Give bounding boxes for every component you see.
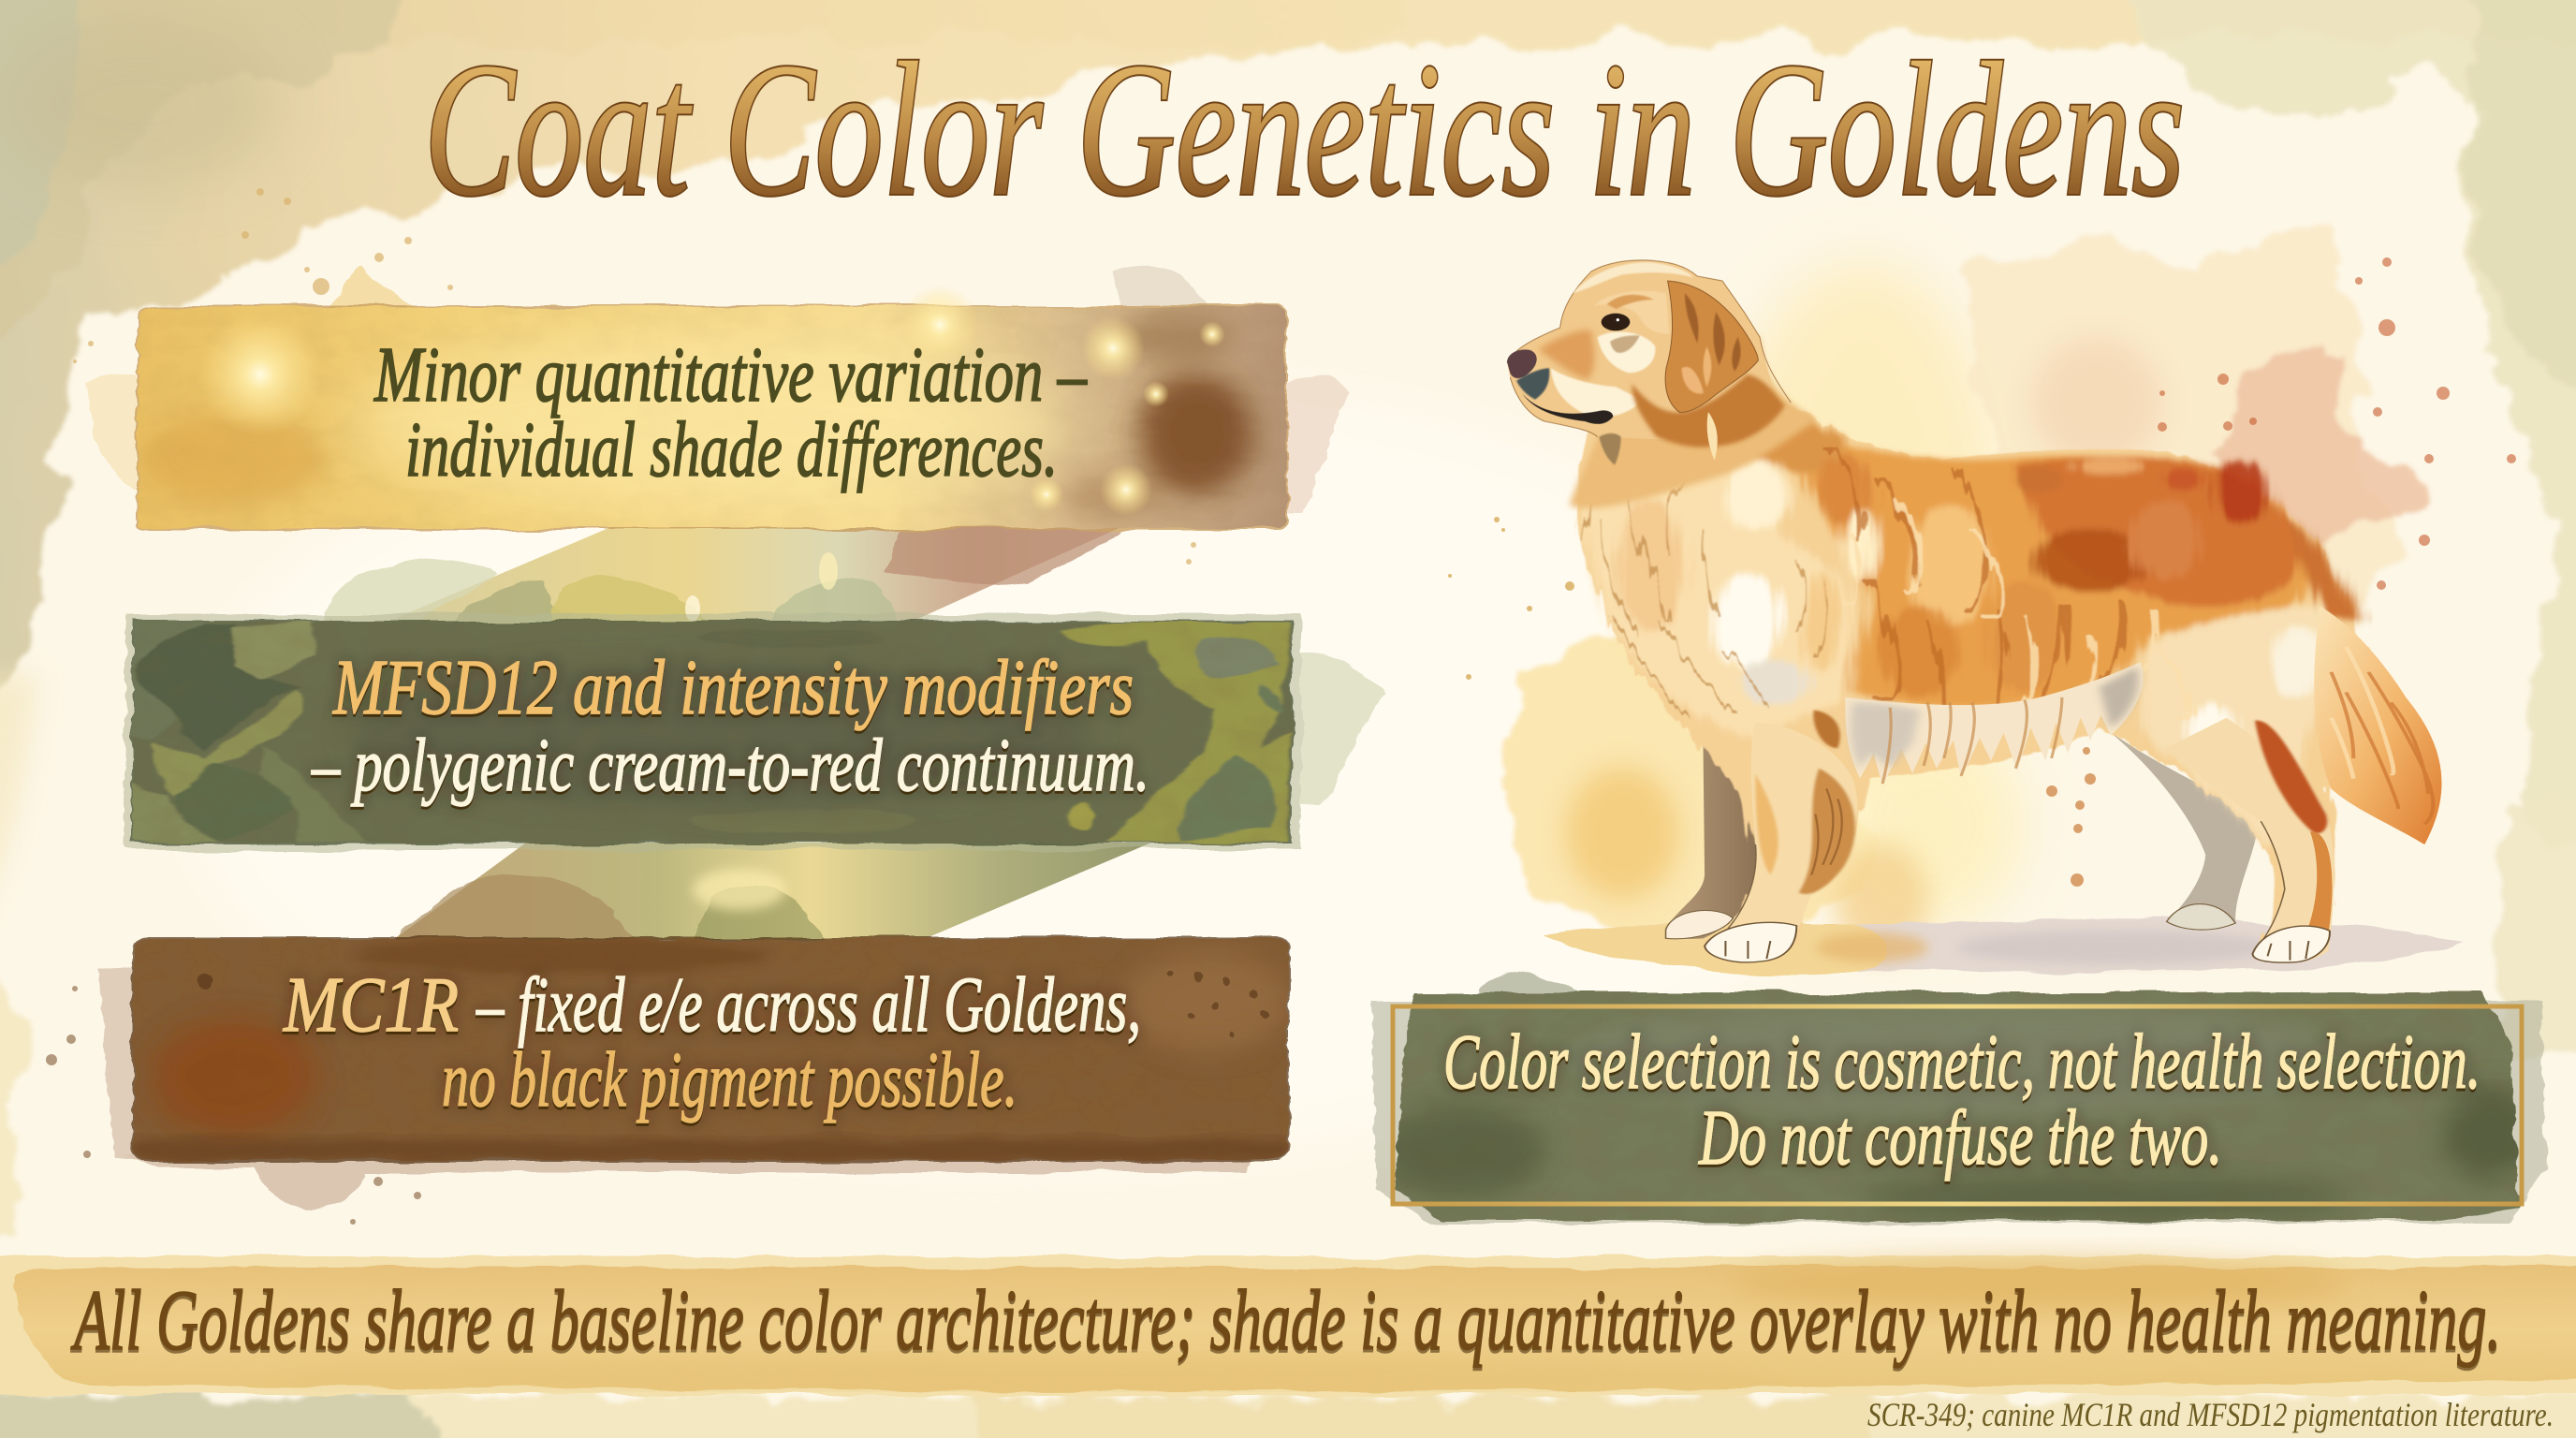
- neck shading: [1703, 393, 1845, 473]
- dog illustration: [1507, 260, 2442, 962]
- panel text: – fixed e/e across all Goldens,: [476, 961, 1141, 1049]
- panel: MFSD12 and intensity modifiers: [125, 614, 1385, 850]
- cheek: [1598, 331, 1655, 373]
- connector ribbon: green to brown: [393, 843, 1151, 940]
- dog backdrop watercolor washes: [1507, 223, 2462, 976]
- panel text: individual shade differences.: [405, 406, 1058, 493]
- paws: [1705, 922, 2330, 962]
- nose: [1507, 349, 1537, 378]
- panel text: [283, 961, 1141, 1123]
- throat shading: [1632, 374, 1785, 448]
- callout: color selection is cosmetic: [1371, 972, 2546, 1228]
- bottom takeaway band: [0, 1256, 2576, 1395]
- camo patches: [129, 618, 1289, 843]
- orange torso: [1805, 438, 2310, 708]
- far legs: [1665, 724, 2261, 939]
- sparkles: [198, 286, 1225, 516]
- ear: [1665, 281, 1758, 413]
- panel text: [373, 331, 1088, 493]
- tail: [2314, 606, 2442, 844]
- hind thigh: [2141, 606, 2328, 850]
- callout text: [1443, 1019, 2481, 1181]
- fur strokes: [1584, 448, 2191, 720]
- connector ribbon: gold to green: [323, 526, 1123, 625]
- panel text: MC1R: [283, 961, 459, 1049]
- furred coat: [1573, 388, 2376, 957]
- panel text: – polygenic cream-to-red continuum.: [311, 725, 1149, 807]
- neck fur blending: [1570, 337, 1816, 508]
- callout text: Do not confuse the two.: [1698, 1094, 2222, 1181]
- paint splatter dots: [46, 188, 2516, 1225]
- rust back: [2010, 457, 2298, 607]
- dog head: [1507, 260, 1816, 508]
- panel text: MFSD12 and intensity modifiers: [332, 644, 1134, 731]
- skull and muzzle: [1507, 260, 1772, 440]
- panel text: Minor quantitative variation –: [373, 331, 1088, 418]
- belly fringe: [1845, 662, 2144, 786]
- front leg: [1710, 710, 1857, 946]
- dog body: [1573, 388, 2442, 962]
- panel: minor quantitative variation: [84, 265, 1348, 528]
- panel: MC1R fixed e/e: [98, 936, 1292, 1210]
- mouth: [1522, 393, 1613, 424]
- eye: [1602, 314, 1630, 330]
- panel text: [311, 644, 1149, 807]
- gold frame: [1393, 1006, 2522, 1204]
- cream chest: [1583, 461, 1853, 743]
- hind leg: [2165, 718, 2334, 962]
- panel text: no black pigment possible.: [442, 1036, 1017, 1123]
